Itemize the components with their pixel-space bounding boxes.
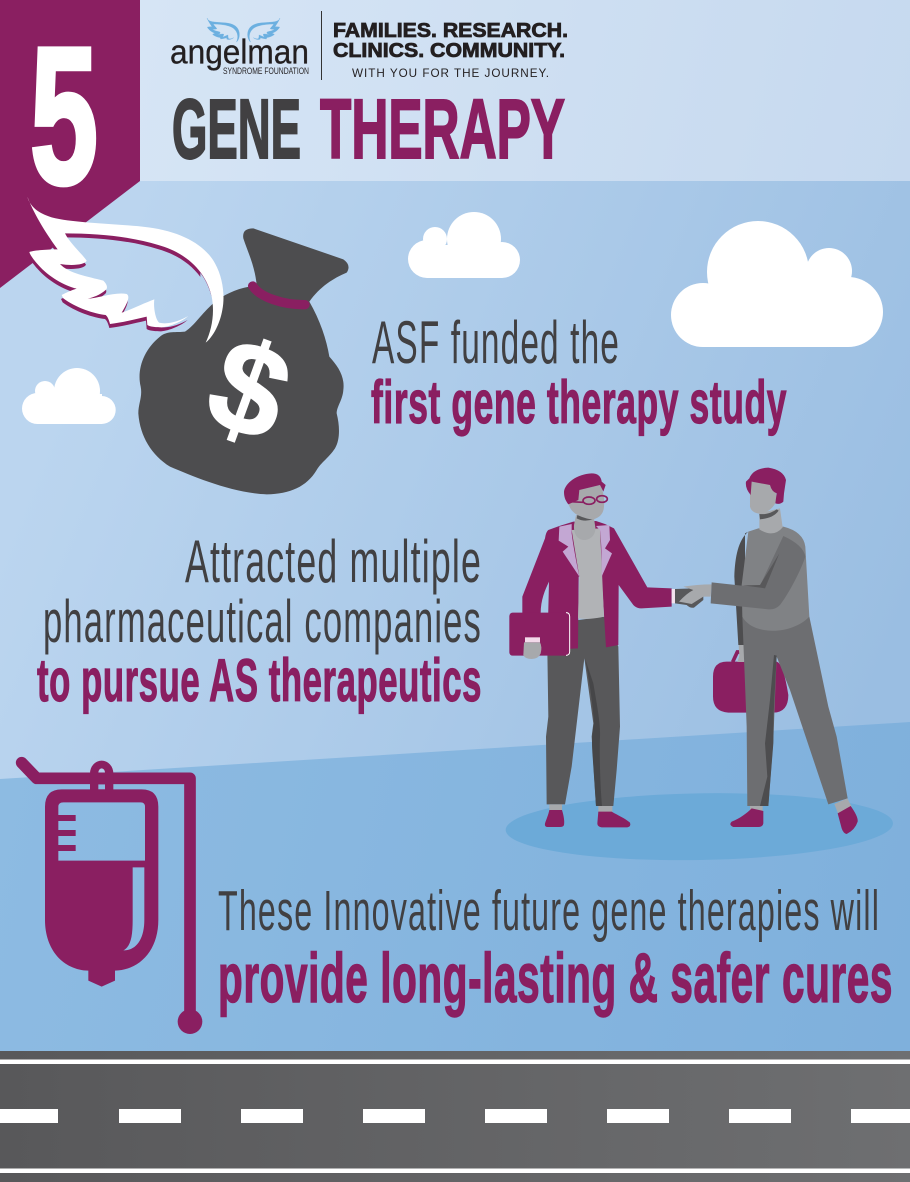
icon: IV drip bag bbox=[22, 761, 202, 1034]
title bbox=[172, 82, 565, 176]
icon: angel wing bbox=[27, 197, 224, 347]
dollar sign: $ bbox=[190, 308, 308, 470]
right person chin shadow bbox=[759, 509, 779, 519]
right person bag bbox=[713, 662, 788, 713]
left person hand on folder bbox=[523, 642, 541, 659]
right person shoes bbox=[730, 806, 858, 834]
logo divider bbox=[321, 11, 322, 80]
text block: first gene therapy study bbox=[371, 309, 787, 436]
left person folder bbox=[509, 613, 570, 656]
ground background bbox=[0, 722, 910, 1052]
tagline line 3: WITH YOU FOR THE JOURNEY. bbox=[352, 66, 550, 80]
right person sleeve shade bbox=[743, 553, 779, 588]
IV ball end bbox=[178, 1009, 202, 1034]
IV hanger bbox=[90, 761, 113, 792]
left person chin shadow bbox=[577, 515, 594, 521]
line: Attracted multiple: Attracted multiple bbox=[185, 528, 482, 595]
right person far arm bbox=[734, 532, 748, 645]
right person far hand bbox=[737, 645, 744, 662]
left person ankles bbox=[549, 804, 612, 813]
illustration: two people shaking hands bbox=[505, 468, 894, 863]
left person sleeve cuff bbox=[672, 589, 675, 603]
line: ASF funded the: ASF funded the bbox=[372, 309, 620, 376]
left person shoes bbox=[545, 810, 630, 827]
cloud: left bbox=[22, 368, 116, 424]
left person neck bbox=[574, 515, 595, 540]
right person sweater bbox=[742, 527, 809, 631]
left person cuff bbox=[525, 637, 540, 642]
tagline line 2: CLINICS. COMMUNITY. bbox=[333, 40, 565, 62]
icon: money bag bbox=[138, 228, 349, 494]
ribbon with number 5 bbox=[0, 0, 140, 288]
wing shadow bbox=[32, 234, 200, 332]
left person hair bbox=[564, 473, 606, 504]
right person ankles bbox=[750, 798, 852, 814]
text block: future therapies bbox=[218, 879, 893, 1017]
bag tie bbox=[253, 286, 305, 305]
text block: pharmaceutical companies bbox=[37, 528, 482, 714]
right person sleeve bbox=[711, 536, 805, 609]
left person shirt bbox=[572, 528, 604, 619]
left person hand bbox=[675, 588, 703, 608]
line: pharmaceutical companies: pharmaceutical companies bbox=[43, 588, 482, 655]
cloud: top right bbox=[671, 221, 883, 347]
icon: logo wings bbox=[207, 18, 280, 42]
header band bbox=[140, 0, 910, 181]
sky background bbox=[0, 181, 910, 801]
road bottom edge line bbox=[0, 1168, 910, 1173]
tagline bbox=[333, 20, 568, 80]
right person trousers bbox=[742, 617, 848, 806]
IV bag body bbox=[45, 789, 158, 987]
wing bbox=[27, 197, 224, 343]
left person trouser shadow bbox=[585, 658, 602, 806]
title word: gene: GENE bbox=[172, 82, 301, 176]
right person head bbox=[750, 482, 777, 514]
left person glasses bbox=[570, 496, 607, 504]
person: left, woman with folder bbox=[509, 473, 703, 827]
number 5: 5 bbox=[30, 7, 98, 225]
person: right, man with bag bbox=[679, 468, 858, 834]
folder edge bbox=[566, 613, 570, 655]
right person neck bbox=[759, 508, 783, 533]
road centre dashes bbox=[0, 1109, 910, 1123]
logo wordmark: angelman bbox=[170, 34, 309, 72]
right person hair bbox=[746, 468, 786, 504]
Angelman Syndrome Foundation logo bbox=[170, 18, 309, 76]
title word: therapy: THERAPY bbox=[320, 82, 565, 176]
road bbox=[0, 1051, 910, 1182]
floor shadow bbox=[505, 790, 894, 863]
left person lapels bbox=[559, 524, 612, 577]
right person trouser shadow bbox=[760, 655, 777, 806]
logo subline: SYNDROME FOUNDATION bbox=[223, 66, 309, 76]
left person head bbox=[569, 485, 604, 519]
cloud: top centre bbox=[408, 212, 520, 278]
tagline line 1: FAMILIES. RESEARCH. bbox=[333, 20, 568, 42]
line: to pursue AS therapeutics: to pursue AS therapeutics bbox=[37, 647, 482, 714]
IV pole and hook bbox=[22, 763, 190, 1022]
bag handle bbox=[733, 652, 744, 662]
road top edge line bbox=[0, 1060, 910, 1064]
right person hand bbox=[679, 584, 712, 604]
left person jacket bbox=[522, 521, 672, 650]
left person trousers bbox=[546, 617, 620, 806]
wing crescent shadow bbox=[192, 263, 214, 305]
